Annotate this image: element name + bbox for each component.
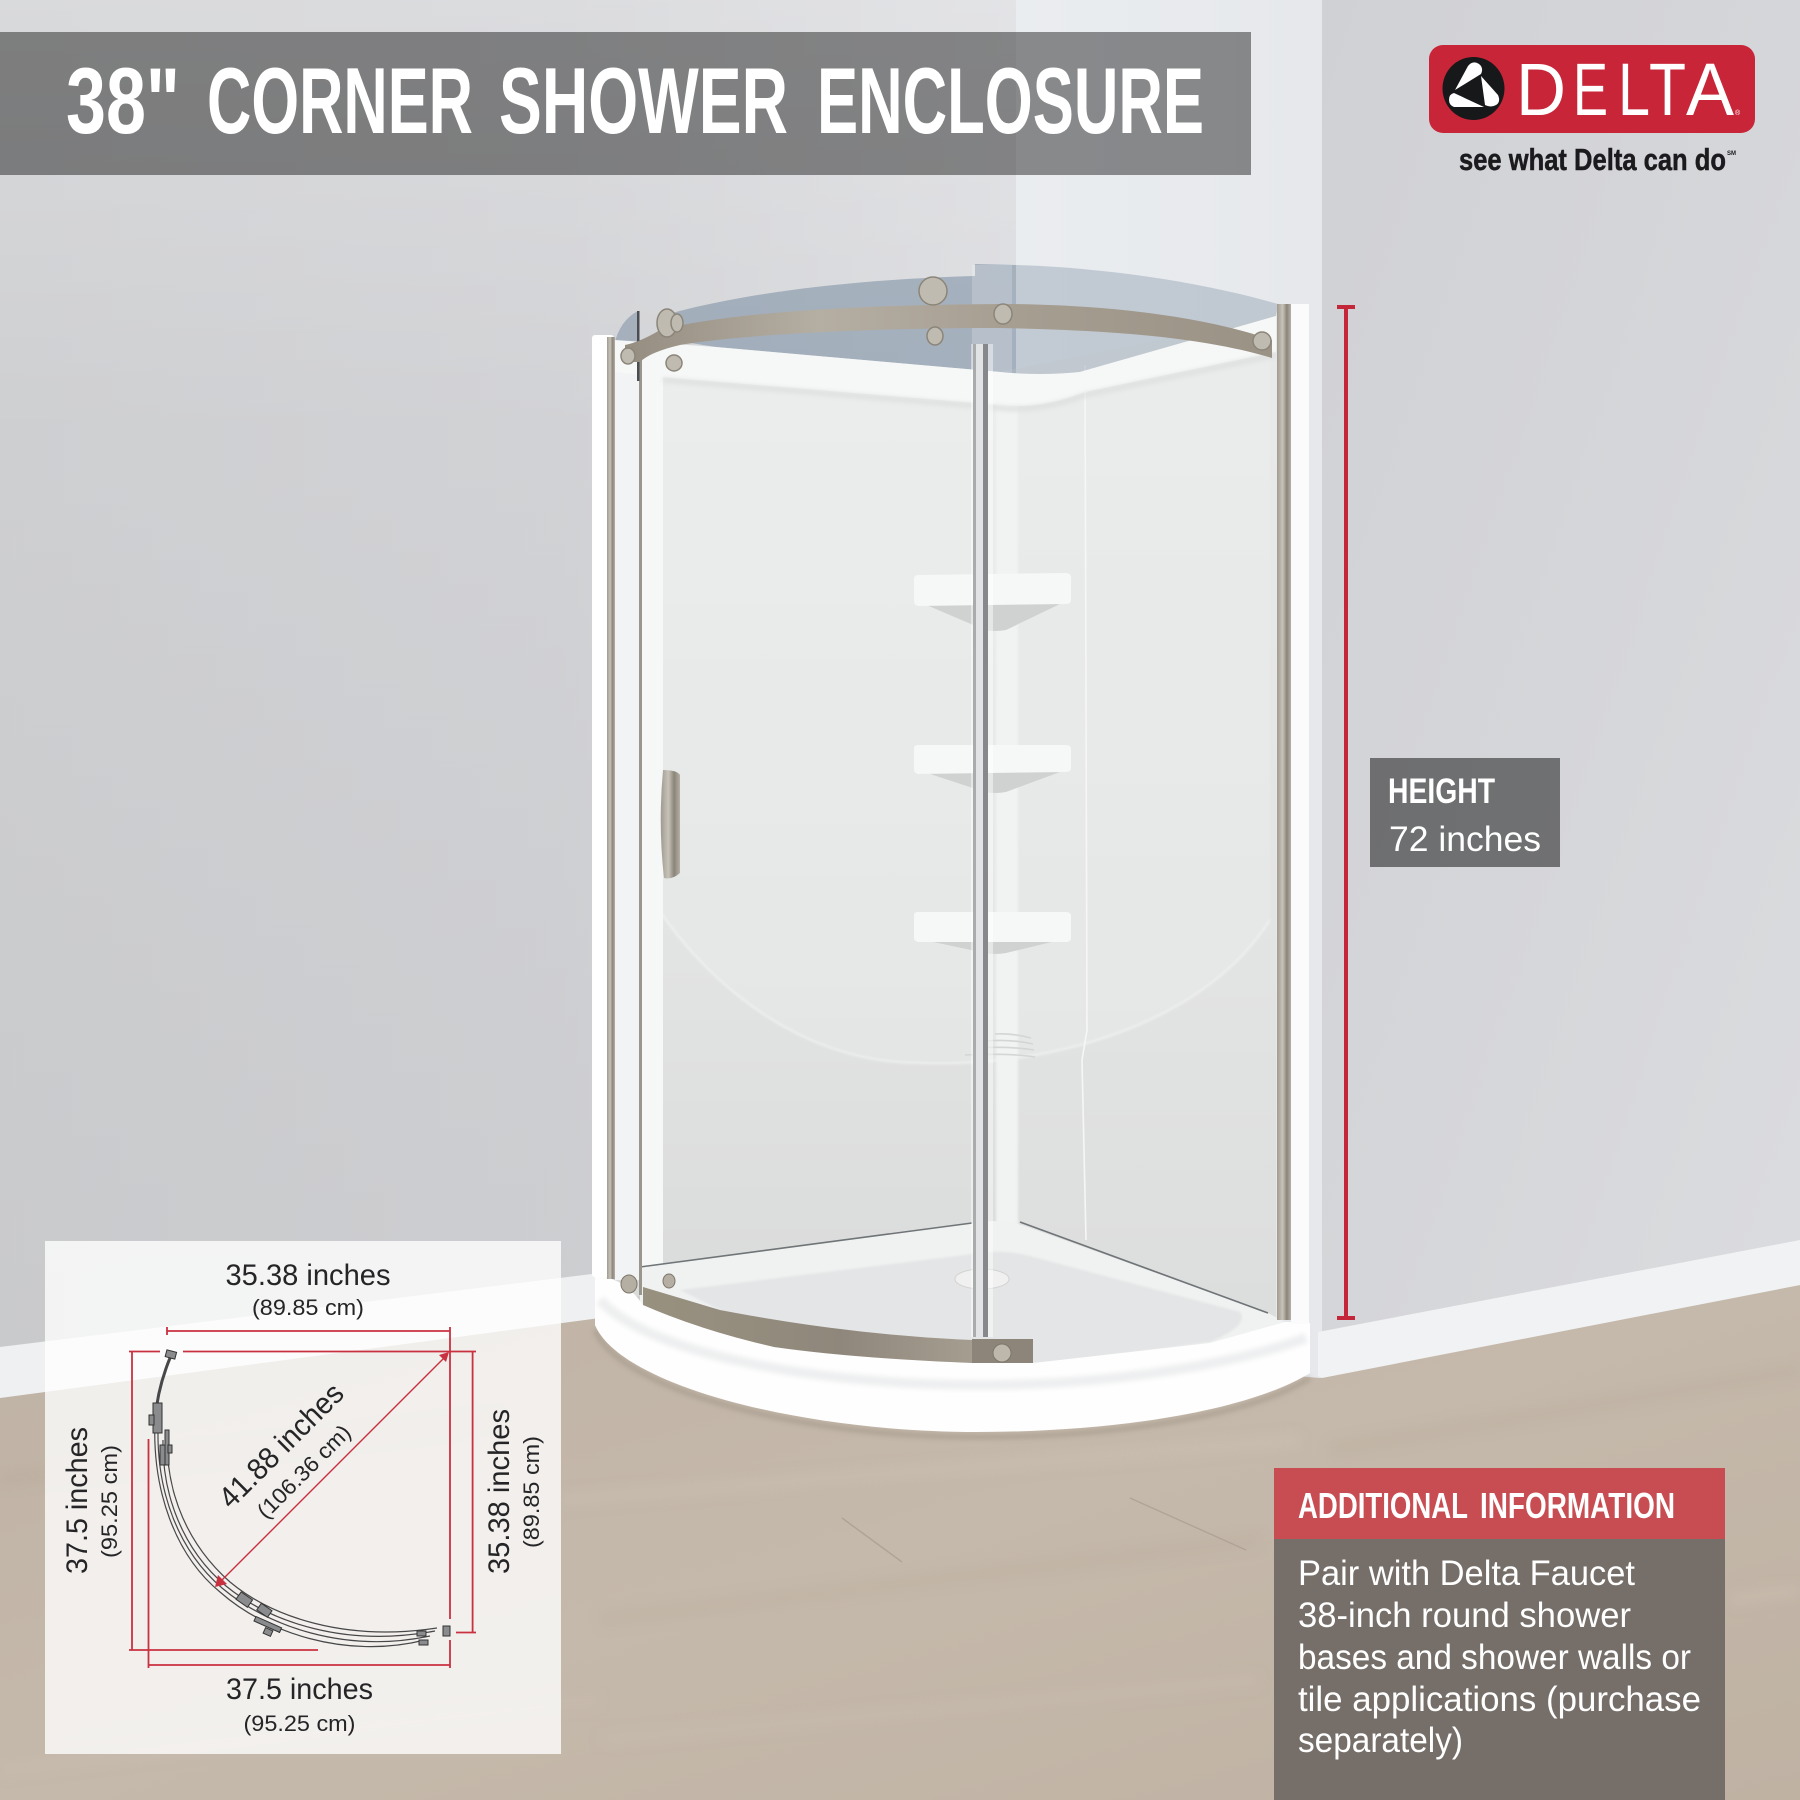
interior left wall [615, 345, 1002, 1300]
Delta logo [1429, 45, 1755, 133]
wordmark: E [1573, 48, 1608, 131]
floor seams [842, 1498, 1246, 1562]
heading: ADDITIONAL [1298, 1485, 1468, 1526]
door glass strip [615, 365, 640, 1280]
top rail [625, 304, 1272, 362]
panel: plan dimensions diagram [45, 1241, 561, 1754]
door edge rods [971, 344, 993, 1337]
red dimension lines [129, 1327, 476, 1668]
heading: INFORMATION [1480, 1485, 1675, 1526]
body text: Pair with Delta Faucet [1298, 1554, 1635, 1593]
rollers [621, 277, 1271, 371]
right baseboard [1318, 1240, 1800, 1378]
label: right depth: (89.85 cm) [519, 1436, 544, 1548]
title: SHOWER [499, 48, 788, 153]
ceiling tint left [672, 264, 1016, 374]
shelves [914, 573, 1071, 954]
heading [1298, 1485, 1675, 1526]
left baseboard [0, 1273, 600, 1398]
glass dark edge top [637, 311, 640, 381]
tagline: see what Delta can do [1459, 142, 1726, 177]
title: 38" [66, 48, 180, 153]
floor [0, 1285, 1800, 1800]
title: CORNER [207, 48, 473, 153]
label: left depth [61, 1427, 122, 1574]
shower base floor [640, 1221, 1300, 1375]
right wall [1322, 0, 1800, 1400]
soap dish ridges [965, 1034, 1035, 1057]
height dimension line [1337, 305, 1355, 1320]
title: ENCLOSURE [817, 48, 1204, 153]
shower base skirt shadow [595, 1330, 1310, 1437]
ceiling tint right [1016, 265, 1278, 375]
wordmark: L [1618, 48, 1650, 131]
body text: tile applications (purchase [1298, 1680, 1701, 1719]
body text: separately) [1298, 1721, 1463, 1760]
hardware blocks [149, 1350, 450, 1645]
shelf 1 [914, 573, 1071, 631]
skirt soft shading [600, 1300, 1306, 1385]
panel body [1274, 1539, 1725, 1800]
label: top width: 35.38 inches [226, 1259, 390, 1292]
shelf 3 [914, 912, 1071, 954]
panel: additional information [1274, 1468, 1725, 1800]
left nickel strip [607, 337, 615, 1279]
wordmark: T [1649, 48, 1686, 131]
interior right wall [1000, 316, 1276, 1320]
tagline: SM [1727, 151, 1736, 157]
glass light band [642, 375, 663, 1270]
middle wall [1016, 0, 1322, 1400]
shower base basin [680, 1252, 1242, 1365]
left white pillar [592, 335, 614, 1277]
shelf 2 [914, 745, 1071, 793]
door handle [661, 770, 680, 878]
enclosure plan curve [149, 1350, 450, 1647]
label: bottom width [226, 1673, 373, 1736]
body text [1298, 1554, 1701, 1760]
glass tip left [614, 311, 638, 345]
shower base skirt [595, 1275, 1310, 1432]
left glass edge [639, 340, 642, 1295]
body text: 38-inch round shower [1298, 1596, 1631, 1635]
height value: 72 inches [1389, 820, 1541, 859]
label: diagonal: 41.88 inches [213, 1377, 351, 1515]
label: diagonal: (106.36 cm) [252, 1420, 356, 1524]
reflection arc edge [661, 913, 1270, 1063]
label: top width: (89.85 cm) [252, 1295, 364, 1320]
height callout [1370, 758, 1560, 867]
label: right depth [483, 1409, 544, 1574]
drain [955, 1269, 1009, 1289]
label: left depth: 37.5 inches [61, 1427, 94, 1574]
door top glass panel [972, 265, 1012, 375]
label: bottom width: (95.25 cm) [244, 1711, 356, 1736]
arrow heads [215, 1352, 449, 1587]
top wall rim [615, 316, 1276, 406]
wall seam [1082, 365, 1087, 1240]
registered mark: ® [1735, 109, 1741, 117]
corner column [996, 400, 1018, 1230]
label: bottom width: 37.5 inches [226, 1673, 373, 1706]
left wall [0, 0, 1017, 1400]
body text: bases and shower walls or [1298, 1638, 1691, 1677]
title bar [0, 32, 1251, 175]
right white pillar [1291, 304, 1309, 1324]
wordmark: D [1516, 48, 1566, 131]
bottom track [643, 1287, 972, 1363]
right nickel strip [1277, 304, 1291, 1320]
reflection region [661, 350, 1270, 1063]
wood grain [0, 1370, 1800, 1770]
height label: HEIGHT [1388, 772, 1495, 811]
icon: delta emblem [1442, 57, 1504, 120]
base back edge [640, 1222, 1268, 1313]
title [66, 48, 1204, 153]
label: right depth: 35.38 inches [483, 1409, 516, 1574]
wordmark [1516, 48, 1735, 131]
label: left depth: (95.25 cm) [97, 1445, 122, 1558]
bottom plate [972, 1339, 1033, 1363]
bottom left knobs [621, 1274, 675, 1293]
label: top width [226, 1259, 390, 1320]
wordmark: A [1686, 48, 1735, 131]
panel heading bar [1274, 1468, 1725, 1539]
shower enclosure [592, 264, 1310, 1437]
rim shadow [663, 355, 1276, 409]
bottom plate knob [993, 1344, 1011, 1362]
